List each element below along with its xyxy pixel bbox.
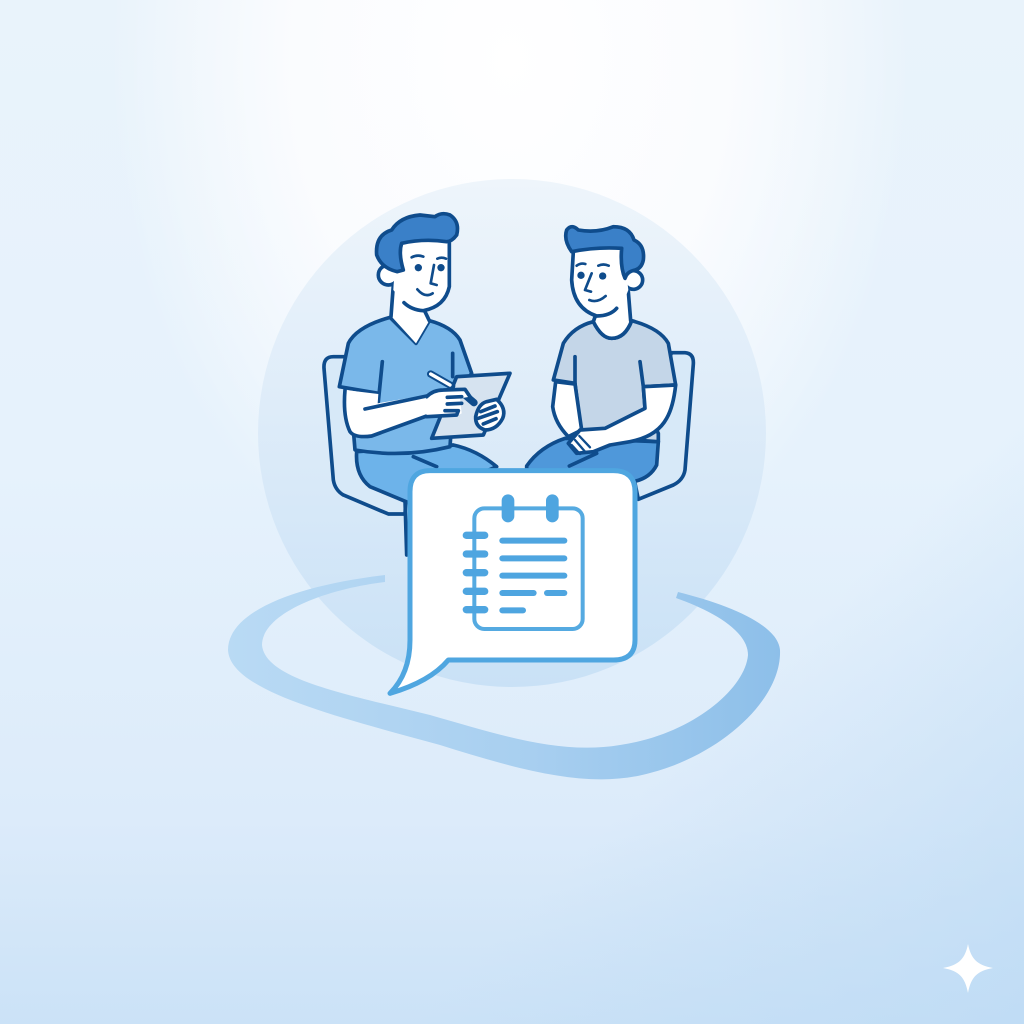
chair leg: left [405, 500, 407, 555]
neck: left [392, 285, 429, 343]
hair: right [566, 227, 644, 278]
chair: left [324, 357, 410, 514]
person: left, taking notes [324, 214, 510, 555]
head: left [378, 265, 398, 285]
icon: notebook [463, 494, 583, 629]
shirt: left [339, 317, 472, 453]
trousers: right [527, 438, 658, 490]
speech bubble [390, 471, 635, 693]
swoosh ring [228, 575, 780, 779]
chair: right [627, 353, 693, 499]
speech bubble with notebook [390, 471, 635, 693]
head: right [593, 290, 632, 338]
person: right, listening [527, 227, 693, 499]
hands: right [572, 436, 590, 454]
arm: right [553, 382, 582, 437]
hand holding pen [425, 388, 471, 417]
face: left [412, 256, 446, 295]
pen [431, 374, 474, 403]
tablet [432, 373, 510, 438]
background circle [258, 179, 766, 687]
icon: sparkle [943, 944, 993, 993]
shirt: right [553, 321, 676, 442]
hair: left [377, 214, 457, 272]
arm: left [344, 390, 450, 437]
hand holding tablet [476, 399, 504, 430]
face: right [577, 264, 609, 301]
trousers: left [356, 445, 497, 503]
